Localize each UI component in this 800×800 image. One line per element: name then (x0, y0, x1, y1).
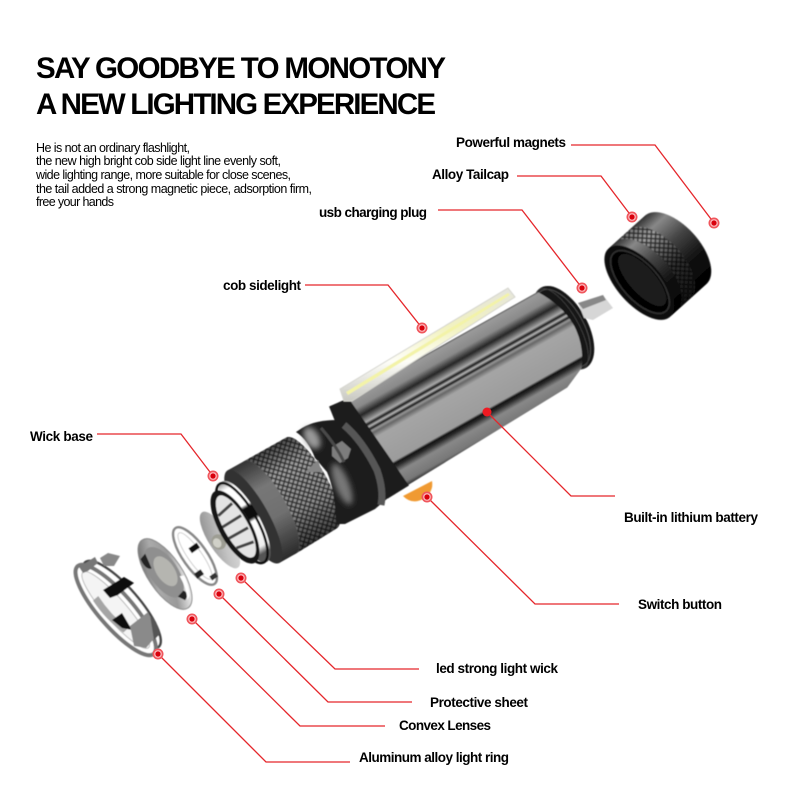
icon: protective lens ring (166, 521, 224, 591)
label: usb charging plug: usb charging plug (319, 205, 427, 220)
leader: wick base (97, 434, 218, 482)
icon: usb charging plug (578, 295, 613, 320)
icon: collar between head and body (296, 420, 388, 524)
label: wick base: Wick base (30, 429, 93, 444)
leader: led strong light wick (236, 572, 419, 669)
icon: cob sidelight strip (340, 288, 515, 401)
label: convex lenses: Convex Lenses (399, 718, 491, 733)
description text block: the tail added a strong magnetic piece, adsorption firm, (36, 182, 312, 196)
title: SAY GOODBYE TO MONOTONY (36, 52, 446, 85)
label: led strong light wick: led strong light wick (436, 661, 558, 676)
label: alloy tailcap: Alloy Tailcap (432, 167, 509, 182)
description text block: wide lighting range, more suitable for close scenes, (35, 168, 291, 182)
leader: usb charging plug (438, 210, 588, 294)
label: protective sheet: Protective sheet (430, 695, 528, 710)
label: switch button: Switch button (638, 597, 722, 612)
description text block (35, 141, 312, 209)
description text block: free your hands (36, 195, 114, 209)
led cup (208, 490, 263, 563)
rear threaded ring (520, 276, 607, 380)
icon: protective sheet disc (193, 506, 247, 574)
leader: cob sidelight (305, 285, 428, 334)
description text block: the new high bright cob side light line evenly soft, (36, 154, 281, 168)
leader: powerful magnets (571, 145, 720, 228)
front gray band and face (230, 453, 310, 561)
description text block: He is not an ordinary flashlight, (36, 141, 190, 155)
icon: convex lens (128, 531, 202, 617)
leader: aluminum alloy light ring (152, 648, 350, 762)
title: A NEW LIGHTING EXPERIENCE (36, 88, 436, 121)
label: built-in lithium battery: Built-in lithium battery (624, 510, 758, 525)
chrome inner band (209, 474, 280, 569)
leader: protective sheet (214, 588, 412, 702)
title (36, 52, 446, 121)
black front ring (201, 483, 269, 571)
label: aluminum alloy light ring: Aluminum alloy light ring (359, 750, 509, 765)
label: cob sidelight: cob sidelight (223, 278, 302, 293)
knurled grip (244, 430, 352, 554)
icon: flashlight head and body (192, 276, 617, 581)
main hex body (330, 284, 603, 501)
icon: alloy tailcap (592, 200, 724, 332)
icon: aluminum alloy light ring (65, 550, 173, 665)
label: powerful magnets: Powerful magnets (456, 135, 566, 150)
leader: switch button (422, 492, 619, 604)
leader: convex lenses (186, 614, 385, 726)
leader: alloy tailcap (517, 176, 638, 222)
flashlight exploded illustration (65, 200, 724, 665)
leader: built-in lithium battery (482, 408, 615, 496)
icon: orange switch button (403, 481, 432, 501)
